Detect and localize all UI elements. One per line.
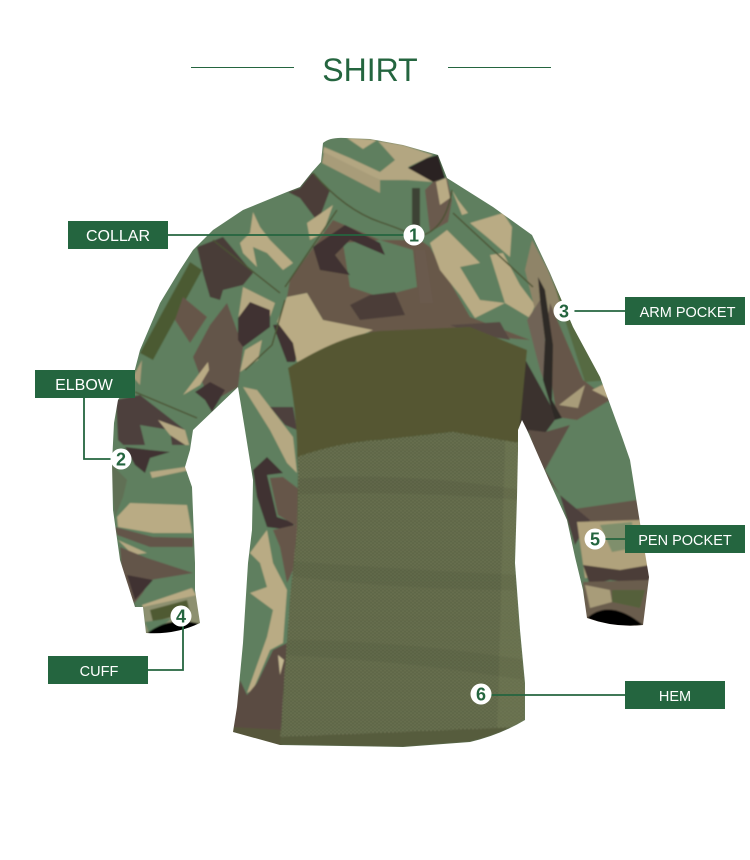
- shirt photo illustration: [100, 130, 660, 755]
- callout 2: elbow: ELBOW: [55, 377, 114, 394]
- left torso camouflage: [230, 387, 300, 750]
- callout 1: collar: COLLAR: [86, 228, 150, 245]
- mesh torso: [280, 432, 525, 747]
- left forearm camouflage: [110, 445, 202, 636]
- olive chest panel: [288, 327, 527, 459]
- right cuff opening: [587, 609, 643, 626]
- callout 6: hem: 6: [476, 684, 486, 704]
- left cuff opening: [146, 621, 200, 634]
- callout 1: collar: [68, 221, 424, 249]
- callout 4: cuff: 4: [176, 606, 186, 626]
- collar camouflage: [322, 138, 452, 232]
- right sleeve camouflage: [516, 240, 652, 630]
- callout 2: elbow: [35, 370, 135, 470]
- callout 6: hem: HEM: [659, 689, 691, 705]
- callout 4: cuff: [48, 606, 192, 684]
- sleeve zip pocket: [538, 277, 562, 420]
- callout 3: arm pocket: ARM POCKET: [640, 305, 736, 321]
- left shoulder and sleeve camouflage: [116, 173, 333, 470]
- title text: SHIRT: [322, 52, 418, 88]
- title rule left: [191, 67, 294, 68]
- callout 1: collar: 1: [409, 226, 419, 246]
- chest camouflage: [273, 188, 535, 362]
- callout 2: elbow: 2: [116, 450, 126, 470]
- callout 3: arm pocket: 3: [559, 302, 569, 322]
- callout 6: hem: [470, 681, 725, 709]
- callout 5: pen pocket: [584, 525, 745, 553]
- seams: [135, 173, 533, 418]
- callout 3: arm pocket: [554, 297, 745, 325]
- callout 4: cuff: CUFF: [80, 664, 118, 680]
- callout 5: pen pocket: 5: [590, 530, 600, 550]
- title rule right: [448, 67, 551, 68]
- callout 5: pen pocket: PEN POCKET: [638, 533, 732, 549]
